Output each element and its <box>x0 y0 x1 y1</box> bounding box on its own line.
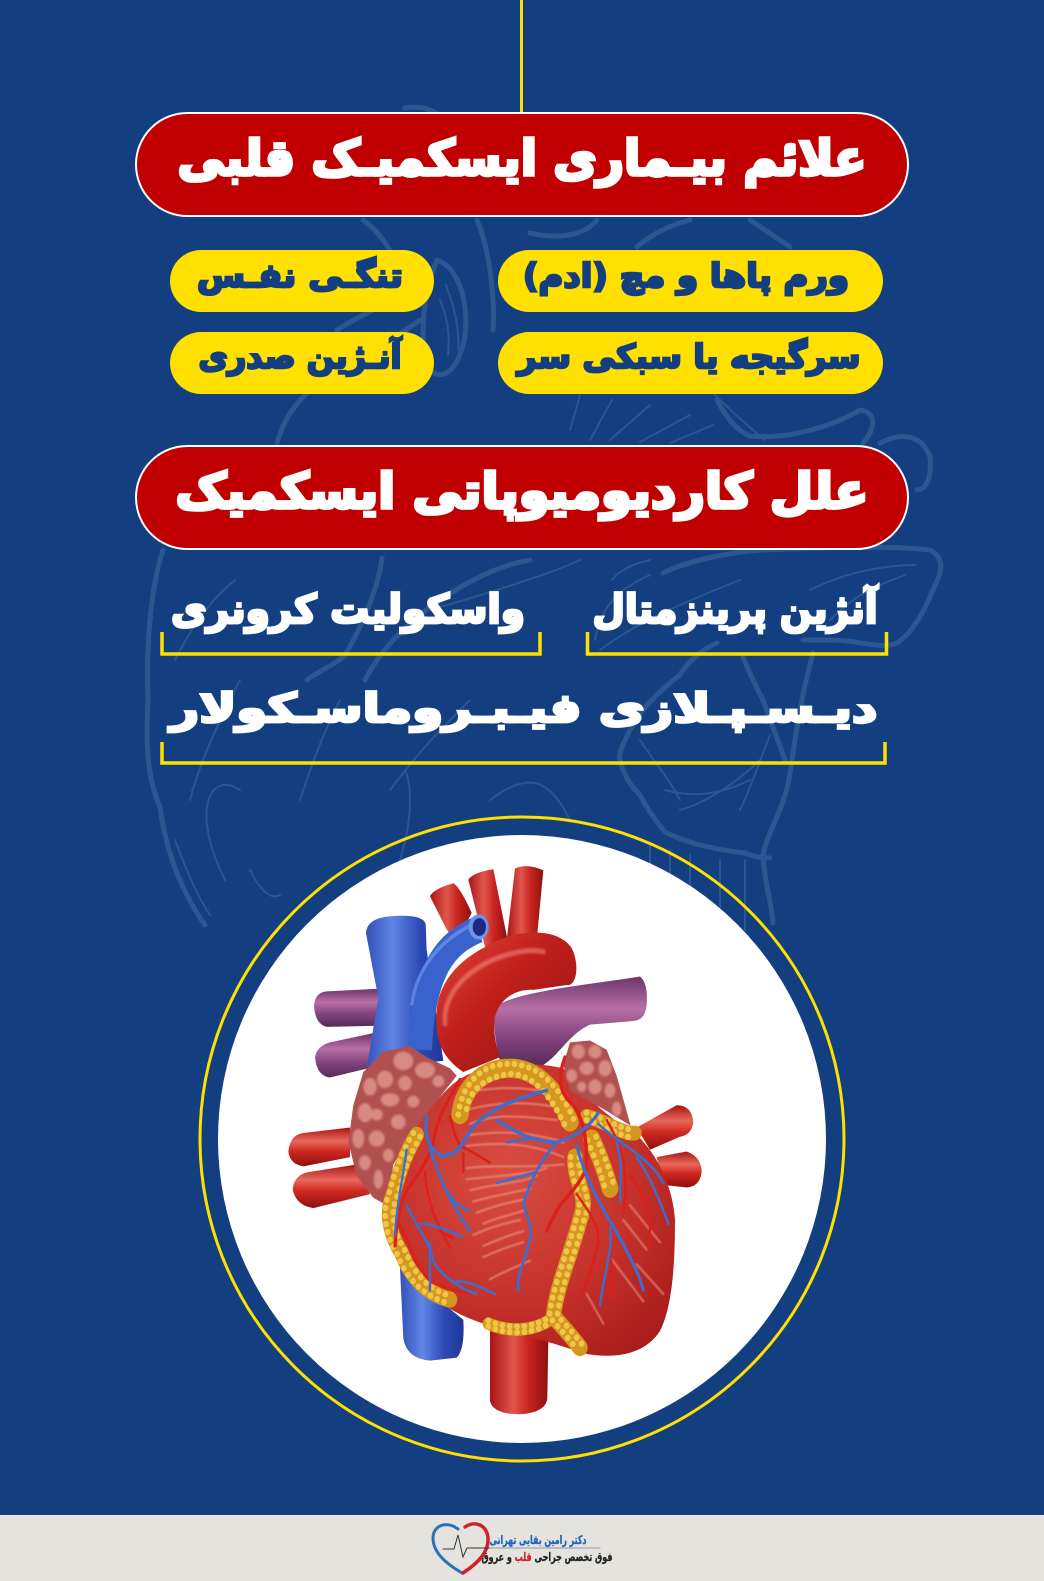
doctor speciality: فوق تخصص جراحی قلب و عروق <box>482 1550 612 1565</box>
panel: symptoms list <box>170 250 883 394</box>
circle frame with heart <box>200 817 844 1461</box>
bottom blue vein and aorta <box>400 1268 464 1361</box>
right atrial lump <box>563 1041 631 1126</box>
panel: causes heading: علل کاردیومیوپاتی ایسکمیک <box>176 463 868 520</box>
blue coronary vessels <box>395 1090 668 1305</box>
logo: heart with ECG line <box>433 1524 600 1573</box>
panel: causes list <box>162 584 886 763</box>
panel: symptoms heading: علائم بیـماری ایسکمیـک قلبی <box>178 130 866 187</box>
symptom: angina: آنـژین صدری <box>198 336 402 377</box>
purple pulmonary trunk <box>494 977 647 1068</box>
muscle stripes <box>467 1088 663 1324</box>
symptom: leg and ankle swelling: ورم پاها و مچ (ادم) <box>523 256 849 296</box>
cause: Prinzmetal angina: آنژین پرینزمتال <box>592 584 879 633</box>
top arteries <box>430 883 472 942</box>
blue branch <box>420 930 478 1050</box>
symptom: dizziness <box>498 332 883 394</box>
blue vena cava <box>366 916 443 1068</box>
heart body <box>386 1064 675 1356</box>
symptom: leg and ankle swelling <box>498 250 883 312</box>
symptom: angina <box>170 332 434 394</box>
cause: coronary vasculitis: واسکولیت کرونری <box>171 587 525 633</box>
cause: fibromuscular dysplasia <box>162 686 885 763</box>
footer bar <box>0 1515 1044 1581</box>
cause: coronary vasculitis <box>162 587 540 654</box>
aortic arch <box>436 933 576 1072</box>
top connector line <box>520 0 523 113</box>
symptom: shortness of breath <box>170 250 434 312</box>
cause: Prinzmetal angina <box>588 584 886 654</box>
side vessels <box>288 1128 350 1166</box>
icon: anatomical heart <box>288 866 702 1414</box>
doctor name: دکتر رامین بقایی تهرانی <box>490 1533 586 1547</box>
symptom: dizziness: سرگیجه یا سبکی سر <box>515 337 860 377</box>
symptom: shortness of breath: تنگـی نفـس <box>197 256 403 295</box>
watermark heart outline <box>147 107 941 930</box>
cause: fibromuscular dysplasia: دیـسـپـلازی فیـبـروماسـکولار <box>168 686 878 732</box>
panel: symptoms heading <box>136 113 908 216</box>
left atrial lump <box>348 1046 457 1205</box>
panel: causes heading <box>136 446 908 549</box>
yellow fat bands <box>385 1064 635 1348</box>
red coronary vessels <box>395 1057 650 1298</box>
